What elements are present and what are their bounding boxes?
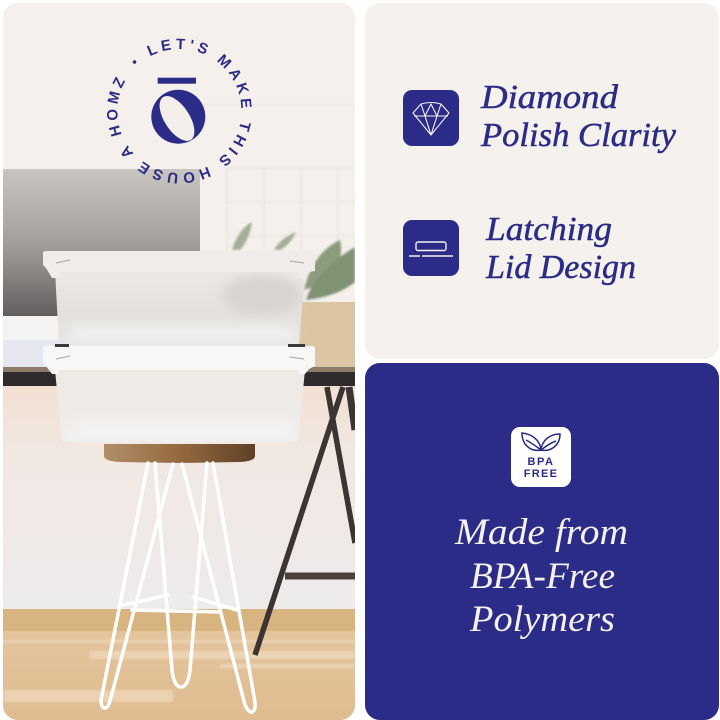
photo background wall (3, 3, 355, 346)
panel: features (365, 3, 719, 359)
logo overbar (158, 78, 196, 84)
panel: BPA free (365, 363, 719, 720)
heading: latching lid design: Lid Design (485, 249, 636, 286)
monitor stand area (3, 316, 63, 340)
lower wall (3, 386, 355, 484)
heading: made from BPA-free polymers: Polymers (469, 599, 615, 640)
panel: product photo (3, 3, 355, 720)
heading: made from BPA-free polymers: Made from (454, 512, 628, 553)
computer monitor (3, 169, 200, 316)
storage bin: bottom (43, 344, 315, 442)
logo badge (107, 38, 252, 184)
heading: diamond polish clarity (480, 79, 677, 154)
icon: BPA free badge: BPA (528, 456, 554, 468)
window grid on wall (200, 105, 355, 250)
wood floor (3, 631, 355, 720)
latch marks (56, 356, 304, 359)
circular slogan: LET'S MAKE THIS HOUSE A HOMZ (107, 38, 252, 184)
dot separator (133, 60, 136, 64)
icon: BPA free badge: FREE (524, 468, 558, 480)
desk top (3, 367, 355, 372)
icon: BPA free badge (511, 427, 571, 487)
heading: latching lid design: Latching (485, 211, 612, 248)
icon: latching lid (403, 220, 459, 276)
heading: made from BPA-free polymers (454, 512, 628, 640)
logo ring opening (153, 90, 201, 147)
stool hairpin legs (101, 463, 255, 712)
icon: diamond (403, 90, 459, 146)
storage bin: top (43, 251, 315, 345)
heading: diamond polish clarity: Diamond (480, 79, 619, 116)
heading: latching lid design (485, 211, 636, 286)
logo ring (151, 90, 205, 144)
desk legs (255, 387, 355, 655)
heading: diamond polish clarity: Polish Clarity (480, 117, 677, 154)
planter (298, 302, 355, 368)
baseboard (3, 609, 355, 631)
plant (232, 222, 355, 300)
stool seat (104, 444, 255, 463)
latch marks (56, 260, 304, 263)
heading: made from BPA-free polymers: BPA-Free (470, 556, 615, 597)
